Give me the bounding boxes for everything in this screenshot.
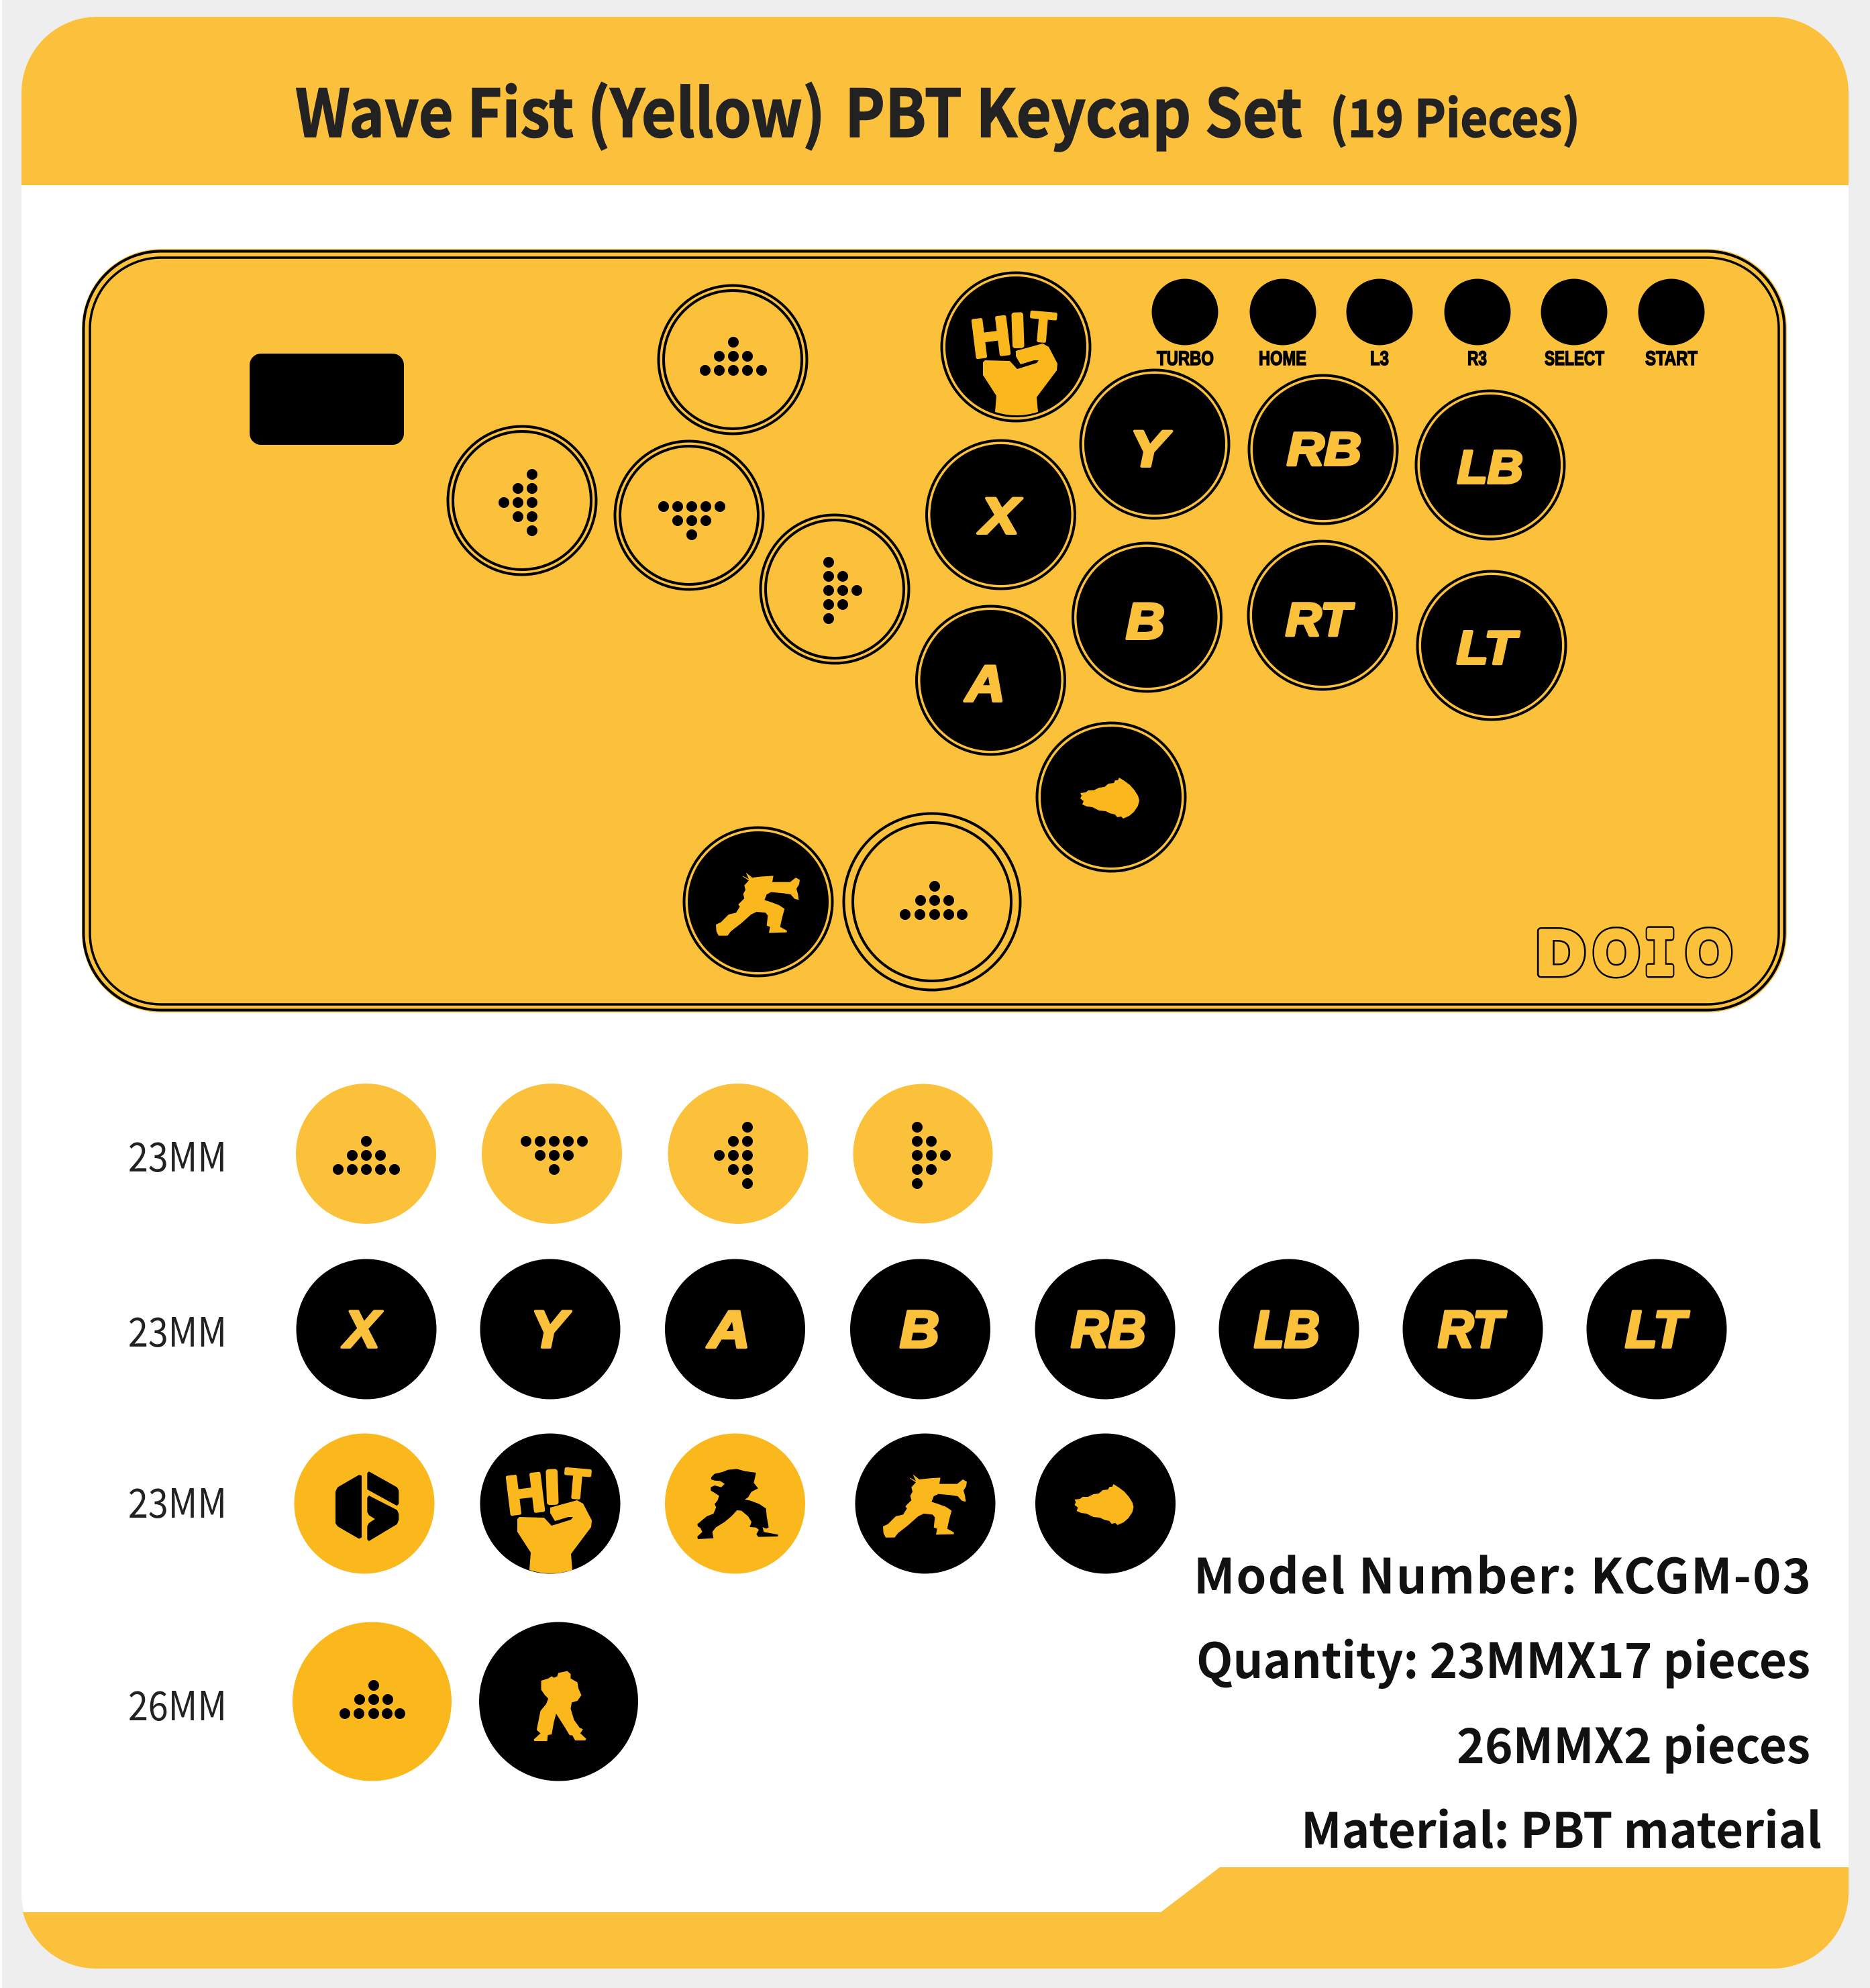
key: LT: [1416, 570, 1567, 721]
keycap: right arrow: [853, 1084, 993, 1224]
key: RT: [1247, 539, 1398, 691]
small button: R3: R3: [1467, 348, 1487, 370]
key: HIT fist: T: [1029, 304, 1057, 350]
keycap: fireball: [1035, 1433, 1176, 1574]
logo: DOIO: D: [1537, 917, 1585, 988]
key: fireball: [1036, 722, 1186, 872]
keycap: HIT fist: H: [503, 1462, 548, 1526]
key: RB: [1248, 374, 1398, 525]
title: (19 Pieces): [1330, 78, 1580, 152]
key: RT: RT: [1286, 593, 1355, 645]
logo: DOIO: I: [1645, 919, 1675, 995]
label: 23MM row 3: 23MM: [128, 1471, 227, 1530]
keycap: X: X: [342, 1300, 382, 1359]
key: LT: LT: [1457, 621, 1520, 674]
keycap: RB: RB: [1071, 1300, 1146, 1359]
directional key: up: [659, 286, 807, 433]
keycap: brand logo: [294, 1433, 435, 1574]
key: RB: RB: [1287, 423, 1361, 475]
small button: L3: [1346, 279, 1413, 370]
small button: R3: [1444, 279, 1511, 370]
keycap: LT: LT: [1625, 1300, 1690, 1359]
keycap: A: [665, 1259, 805, 1400]
label: 26MM row 4: 26MM: [128, 1674, 227, 1732]
key: fighter hadoken pose: [683, 827, 833, 977]
small button: START: START: [1645, 348, 1698, 370]
small button: SELECT: SELECT: [1545, 348, 1604, 370]
keycap: 26mm directional: [293, 1622, 452, 1781]
keycap: HIT fist: T: [563, 1461, 591, 1507]
directional key: down: [615, 441, 764, 589]
keycap: 26mm fighter standing: [479, 1622, 638, 1781]
logo: DOIO: O: [1594, 917, 1639, 988]
small button: TURBO: TURBO: [1157, 348, 1214, 370]
title: PBT Keycap Set: [845, 61, 1302, 156]
directional key: right: [761, 515, 908, 663]
label: 23MM row 2: 23MM: [128, 1300, 227, 1359]
text block: specifications: Quantity: 23MMX17 pieces: [1196, 1622, 1810, 1692]
panel: keyboard layout: [82, 249, 1787, 1012]
small button: TURBO: [1151, 279, 1218, 370]
logo: DOIO: D: [1537, 917, 1585, 988]
keycap: Y: Y: [531, 1300, 571, 1359]
logo: DOIO: O: [1686, 917, 1732, 988]
directional key: left: [448, 427, 596, 574]
keycap: X: [297, 1259, 436, 1400]
keycap: HIT fist: I: [546, 1462, 559, 1512]
keycap: A: A: [707, 1300, 750, 1359]
key: HIT fist: [941, 271, 1091, 423]
small button: HOME: [1249, 279, 1316, 370]
keycap: Y: [480, 1259, 620, 1400]
key: Y: Y: [1130, 421, 1172, 478]
text block: specifications: Model Number: KCGM-03: [1194, 1537, 1811, 1608]
key: X: [925, 439, 1076, 590]
text block: specifications: Material: PBT material: [1301, 1791, 1822, 1862]
key: B: B: [1126, 593, 1165, 650]
keycap: HIT fist: [480, 1433, 620, 1574]
keycap: RT: RT: [1438, 1300, 1507, 1359]
logo: DOIO: I: [1645, 919, 1675, 995]
keycap: LB: LB: [1254, 1300, 1320, 1359]
keycap: fighter stance on yellow: [665, 1433, 805, 1574]
keycap: B: [850, 1259, 990, 1400]
small button: L3: L3: [1370, 348, 1389, 370]
label: 23MM row 1: 23MM: [128, 1125, 227, 1184]
key: A: A: [964, 656, 1005, 713]
keycap: up arrow: [296, 1084, 436, 1224]
key: B: [1072, 542, 1223, 692]
keycap: fighter hadoken on black: [855, 1433, 996, 1574]
small button: HOME: HOME: [1259, 348, 1306, 370]
key: 26mm directional: [844, 813, 1020, 990]
text block: specifications: 26MMX2 pieces: [1457, 1707, 1810, 1777]
display window: [250, 354, 404, 445]
keycap: B: B: [900, 1300, 939, 1359]
logo: DOIO: O: [1686, 917, 1732, 988]
small button: START: [1639, 279, 1704, 370]
footer band: [23, 1867, 1849, 1969]
keycap: LT: [1586, 1259, 1727, 1400]
key: LB: LB: [1457, 441, 1523, 493]
title: Wave Fist (Yellow): [295, 61, 825, 156]
logo: DOIO: [1537, 917, 1732, 995]
key: Y: [1079, 369, 1231, 519]
key: X: X: [977, 488, 1023, 545]
key: LB: [1414, 389, 1566, 541]
logo: DOIO: O: [1594, 917, 1639, 988]
key: HIT fist: I: [1011, 305, 1025, 355]
title: [295, 61, 1580, 156]
key: HIT fist: H: [968, 305, 1014, 369]
header band: [21, 17, 1849, 185]
keycap: LB: [1218, 1259, 1359, 1400]
keycap: RT: [1402, 1259, 1543, 1400]
small button: SELECT: [1541, 279, 1608, 370]
keycap: RB: [1035, 1259, 1176, 1400]
keycap: left arrow: [668, 1084, 808, 1224]
text block: specifications: [1194, 1537, 1822, 1862]
keycap: down arrow: [482, 1084, 622, 1224]
key: A: [915, 605, 1066, 755]
